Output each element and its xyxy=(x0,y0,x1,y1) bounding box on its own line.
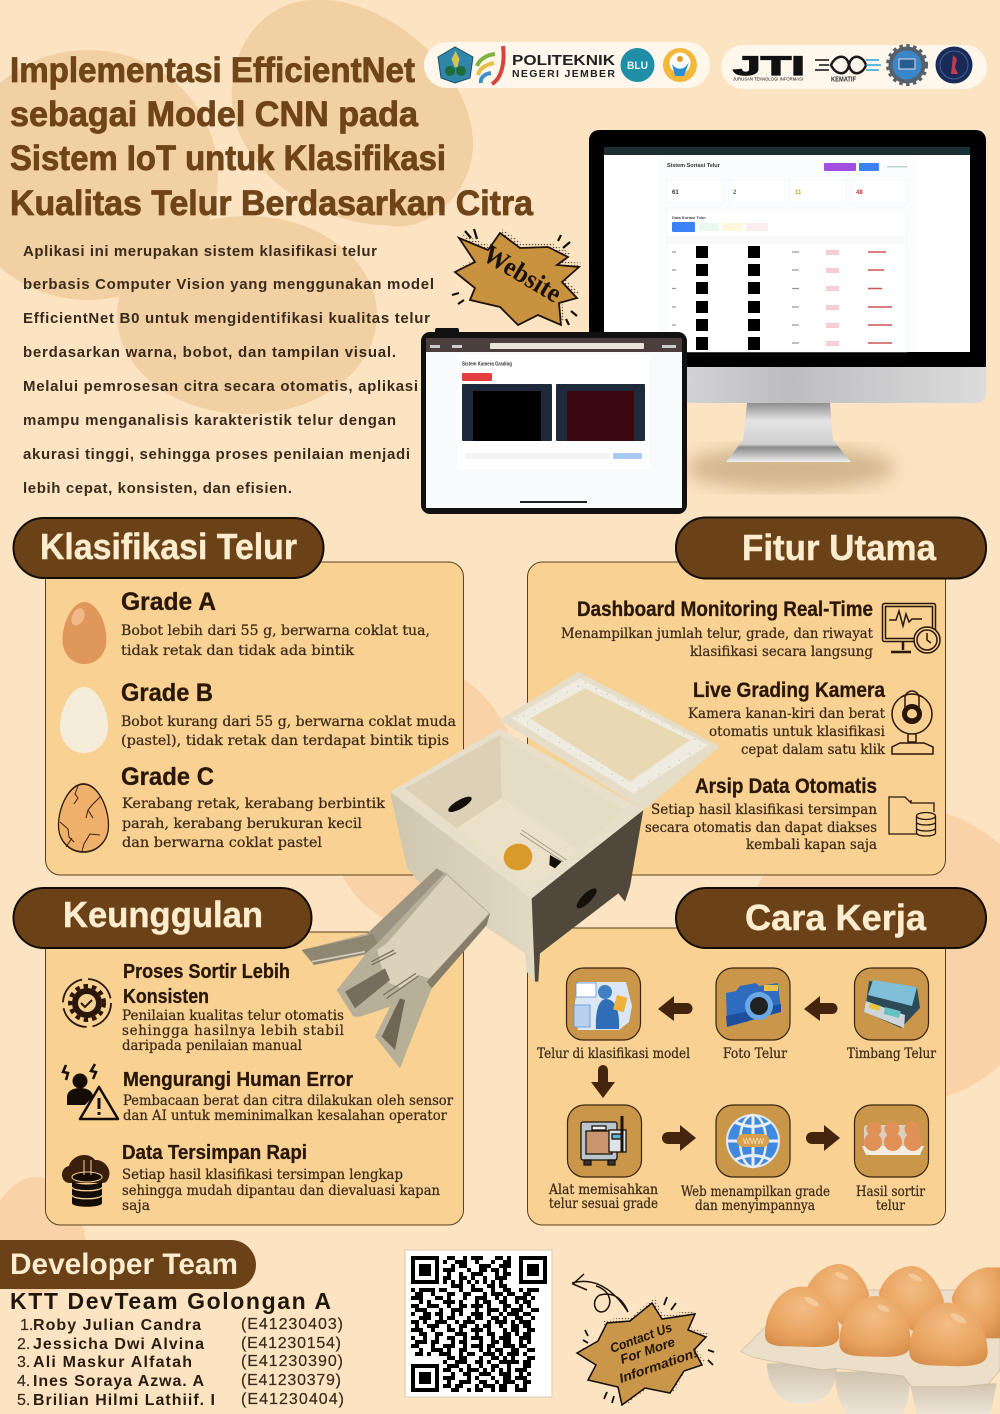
camera grading screen: Sistem Kamera Grading xyxy=(462,362,512,368)
step: photo xyxy=(716,968,790,1062)
icon: egg tray xyxy=(862,1122,924,1155)
icon: gear badge xyxy=(888,46,926,84)
icon: brown egg xyxy=(62,602,106,664)
intro paragraph: EfficientNet B0 untuk mengidentifikasi kualitas telur xyxy=(23,310,430,327)
middle branch xyxy=(345,968,390,1008)
text: JTI logo: JURUSAN TEKNOLOGI INFORMASI xyxy=(733,76,803,82)
feature: live camera: otomatis untuk klasifikasi xyxy=(709,724,886,740)
step: photo: Foto Telur xyxy=(723,1046,787,1062)
advantage: consistent sorting: daripada penilaian manual xyxy=(122,1038,302,1054)
icon: machine xyxy=(581,1116,626,1165)
intro paragraph: Aplikasi ini merupakan sistem klasifikasi telur xyxy=(23,243,377,260)
inner back wall xyxy=(500,735,625,850)
feature: dashboard xyxy=(561,598,940,660)
egg highlights xyxy=(803,1270,968,1326)
chute xyxy=(302,868,490,1068)
member list: 5. xyxy=(17,1392,30,1409)
icon: monitor with clock xyxy=(882,604,940,653)
advantage: consistent sorting: sehingga hasilnya lebih stabil xyxy=(122,1023,344,1039)
advantage: tidy data: sehingga mudah dipantau dan dievaluasi kapan xyxy=(122,1183,440,1199)
stat values xyxy=(672,190,863,196)
panel: Keunggulan xyxy=(14,888,464,1225)
feature: archive: Setiap hasil klasifikasi tersimpan xyxy=(651,802,877,818)
step: sorter machine xyxy=(548,1105,658,1212)
box floor xyxy=(457,798,578,887)
step: classification: Telur di klasifikasi model xyxy=(537,1046,690,1062)
panel: Fitur Utama xyxy=(528,518,986,875)
step: sorted eggs xyxy=(854,1105,928,1214)
feature: live camera: Kamera kanan-kiri dan berat xyxy=(688,706,886,722)
camera grading screen xyxy=(426,338,682,508)
tablet mockup xyxy=(421,328,687,514)
icon: scale xyxy=(864,980,920,1028)
member list xyxy=(17,1316,344,1409)
camera panels xyxy=(462,384,645,441)
egg tray illustration xyxy=(741,1264,1000,1414)
icon: folder database xyxy=(889,797,936,836)
member list: Brilian Hilmi Lathiif. I xyxy=(33,1392,215,1409)
intro paragraph: berbasis Computer Vision yang menggunakan model xyxy=(23,276,434,293)
member list: 4. xyxy=(17,1373,30,1390)
heading pill xyxy=(676,518,986,578)
Grade B: Grade B xyxy=(121,679,213,707)
burst: Website: Website xyxy=(478,238,567,308)
inner left wall xyxy=(405,735,502,828)
tray cups xyxy=(767,1363,997,1414)
dashboard screen: Sistem Sortasi Telur xyxy=(667,163,721,169)
burst text xyxy=(608,1319,700,1386)
Grade A: Grade A xyxy=(121,588,216,616)
Grade C: Grade C xyxy=(121,763,214,791)
egg sorter box illustration xyxy=(302,672,720,1068)
heading pill xyxy=(0,1240,256,1289)
step: sorted eggs: telur xyxy=(876,1198,905,1214)
icon: AI model illustration xyxy=(574,982,632,1030)
step: web: Web menampilkan grade xyxy=(681,1184,830,1200)
member list: (E41230390) xyxy=(241,1353,343,1370)
icon: camera xyxy=(726,983,781,1027)
data table xyxy=(667,210,907,352)
step: web xyxy=(681,1105,830,1214)
advantage: consistent sorting: Penilaian kualitas telur otomatis xyxy=(122,1008,344,1024)
icon: BLU badge xyxy=(620,48,654,82)
burst: Website xyxy=(452,229,582,325)
stat cards xyxy=(667,180,907,203)
Grade A: Bobot lebih dari 55 g, berwarna coklat tua, xyxy=(121,623,430,639)
Grade C xyxy=(58,763,386,852)
icon: shield logo xyxy=(438,47,473,83)
icon: cloud database xyxy=(62,1155,110,1207)
arrow: left xyxy=(658,996,692,1021)
step: weighing xyxy=(847,968,936,1062)
icon: cracked egg xyxy=(58,784,108,852)
icon: KEMATIF logo: KEMATIF xyxy=(831,76,857,84)
stat values: 11 xyxy=(795,190,802,196)
Grade B: Bobot kurang dari 55 g, berwarna coklat muda xyxy=(121,714,456,730)
box outer right face xyxy=(532,810,643,982)
arrow: left xyxy=(804,996,838,1021)
member list: 2. xyxy=(17,1336,30,1353)
arrow: down xyxy=(591,1065,615,1098)
chute left wall xyxy=(367,868,444,943)
advantage: tidy data: saja xyxy=(122,1198,150,1214)
advantage: less human error: Mengurangi Human Error xyxy=(123,1069,353,1091)
heading pill: Klasifikasi Telur xyxy=(40,526,297,567)
arrow: right xyxy=(806,1125,840,1151)
feature: live camera xyxy=(688,679,933,758)
open lid xyxy=(499,672,720,810)
chute right wall xyxy=(427,913,490,988)
text: JTI logo xyxy=(733,51,805,82)
member list: 3. xyxy=(17,1354,30,1371)
intro paragraph: mampu menganalisis karakteristik telur dengan xyxy=(23,412,396,429)
text: JTI logo: JTI xyxy=(733,51,805,81)
developer team xyxy=(0,1240,344,1409)
text: Politeknik Negeri Jember: POLITEKNIK xyxy=(512,52,615,69)
heading pill: Keunggulan xyxy=(63,894,263,935)
arrow: curly arrow to QR xyxy=(572,1281,628,1312)
step: weighing: Timbang Telur xyxy=(847,1046,936,1062)
icon: BLU badge: BLU xyxy=(627,60,648,72)
heading pill: Developer Team xyxy=(10,1248,238,1281)
member list: Ali Maskur Alfatah xyxy=(33,1354,192,1371)
icon: person warning xyxy=(63,1064,118,1119)
feature: archive: secara otomatis dan dapat diakses xyxy=(645,820,877,836)
monitor stand xyxy=(726,403,851,462)
step: sorter machine: telur sesuai grade xyxy=(549,1196,658,1212)
Grade C: dan berwarna coklat pastel xyxy=(122,835,322,851)
icon: webcam xyxy=(892,691,933,754)
intro paragraph: lebih cepat, konsisten, dan efisien. xyxy=(23,480,292,497)
Grade B: (pastel), tidak retak dan terdapat bintik tipis xyxy=(121,733,449,749)
stat values: 61 xyxy=(672,190,679,196)
title: sebagai Model CNN pada xyxy=(10,94,418,134)
panel: Cara Kerja xyxy=(528,888,986,1225)
arrow head xyxy=(573,1274,587,1290)
text: Politeknik Negeri Jember xyxy=(512,52,615,80)
icon: globe xyxy=(727,1115,779,1167)
QR code xyxy=(405,1250,552,1397)
Grade C: parah, kerabang berukuran kecil xyxy=(122,816,362,832)
box rim xyxy=(390,728,643,898)
text: Politeknik Negeri Jember: NEGERI JEMBER xyxy=(512,68,615,80)
intro paragraph: Melalui pemrosesan citra secara otomatis, aplikasi xyxy=(23,378,418,395)
icon: KEMATIF logo xyxy=(815,57,881,84)
back eggs xyxy=(807,1264,1000,1338)
icon: navy badge xyxy=(936,46,972,84)
advantage: tidy data: Data Tersimpan Rapi xyxy=(122,1142,307,1164)
title: Kualitas Telur Berdasarkan Citra xyxy=(10,183,533,223)
member list: Ines Soraya Azwa. A xyxy=(33,1373,204,1390)
box outer left face xyxy=(390,792,535,982)
intro paragraph: berdasarkan warna, bobot, dan tampilan visual. xyxy=(23,344,396,361)
Grade A: tidak retak dan tidak ada bintik xyxy=(121,643,355,659)
dashboard screen xyxy=(604,147,970,352)
feature: dashboard: klasifikasi secara langsung xyxy=(690,644,873,660)
feature: dashboard: Menampilkan jumlah telur, grade, dan riwayat xyxy=(561,626,874,642)
arrow: right xyxy=(662,1125,696,1151)
logo bar: Politeknik Negeri Jember xyxy=(424,42,710,88)
step: sorted eggs: Hasil sortir xyxy=(856,1184,925,1200)
member list: (E41230404) xyxy=(241,1391,344,1408)
feature: archive: kembali kapan saja xyxy=(746,837,877,853)
heading pill xyxy=(14,518,324,578)
front eggs xyxy=(765,1287,988,1366)
burst text: Contact Us xyxy=(608,1319,674,1356)
Grade A xyxy=(62,588,430,664)
advantage: less human error xyxy=(63,1064,454,1124)
Grade C: Kerabang retak, kerabang berbintik xyxy=(122,796,386,812)
egg on floor xyxy=(501,841,535,873)
tray body xyxy=(741,1290,1000,1387)
rails xyxy=(372,950,418,998)
advantage: consistent sorting xyxy=(63,961,344,1054)
monitor mockup xyxy=(589,130,986,490)
chute silhouette xyxy=(302,868,490,1068)
burst text: For More xyxy=(618,1334,677,1367)
burst: Contact Us xyxy=(577,1297,714,1405)
icon: gear check xyxy=(63,979,111,1027)
advantage: less human error: Pembacaan berat dan citra dilakukan oleh sensor xyxy=(123,1093,454,1109)
panel: Klasifikasi Telur xyxy=(14,518,464,875)
data table: Data Sortasi Telur xyxy=(672,215,706,220)
heading pill: Fitur Utama xyxy=(742,527,937,568)
title: Sistem IoT untuk Klasifikasi xyxy=(10,138,446,178)
advantage: tidy data xyxy=(62,1142,440,1214)
chute deck xyxy=(377,875,489,988)
left branch xyxy=(302,934,377,965)
Grade B xyxy=(60,679,456,753)
feature: live camera: Live Grading Kamera xyxy=(693,679,885,702)
heading pill: Cara Kerja xyxy=(745,897,927,938)
feature: archive: Arsip Data Otomatis xyxy=(695,775,877,798)
icon: pale egg xyxy=(60,687,108,753)
icon: globe: WWW xyxy=(743,1136,764,1146)
intro paragraph: akurasi tinggi, sehingga proses penilaian menjadi xyxy=(23,446,410,463)
stat values: 48 xyxy=(856,190,863,196)
member list: (E41230379) xyxy=(241,1372,341,1389)
advantage: consistent sorting: Proses Sortir Lebih xyxy=(123,961,290,983)
icon: yellow badge xyxy=(663,48,697,82)
title xyxy=(10,50,533,223)
feature: live camera: cepat dalam satu klik xyxy=(741,742,886,758)
step: classification xyxy=(537,968,690,1062)
intro paragraph xyxy=(23,243,434,497)
advantage: tidy data: Setiap hasil klasifikasi tersimpan lengkap xyxy=(122,1167,403,1183)
step: web: dan menyimpannya xyxy=(695,1198,815,1214)
lower branch xyxy=(382,998,405,1050)
feature: dashboard: Dashboard Monitoring Real-Time xyxy=(577,598,873,621)
feature: archive xyxy=(645,775,936,853)
member list: Jessicha Dwi Alvina xyxy=(33,1336,204,1353)
advantage: consistent sorting: Konsisten xyxy=(123,986,209,1008)
heading pill xyxy=(14,888,312,948)
heading pill xyxy=(676,888,986,948)
team name: KTT DevTeam Golongan A xyxy=(10,1288,331,1314)
logo bar: JTI and organisations xyxy=(721,45,987,89)
stat values: 2 xyxy=(733,190,737,196)
step: sorter machine: Alat memisahkan xyxy=(548,1182,658,1198)
floor slot and rails xyxy=(520,830,567,868)
member list: (E41230403) xyxy=(241,1316,343,1333)
member list: 1. xyxy=(20,1317,33,1334)
title: Implementasi EfficientNet xyxy=(10,50,415,90)
burst text: Information! xyxy=(617,1345,700,1386)
member list: Roby Julian Candra xyxy=(33,1317,201,1334)
advantage: less human error: dan AI untuk meminimalkan kesalahan operator xyxy=(123,1108,448,1124)
icon: swoosh logo xyxy=(477,46,504,84)
member list: (E41230154) xyxy=(241,1335,341,1352)
